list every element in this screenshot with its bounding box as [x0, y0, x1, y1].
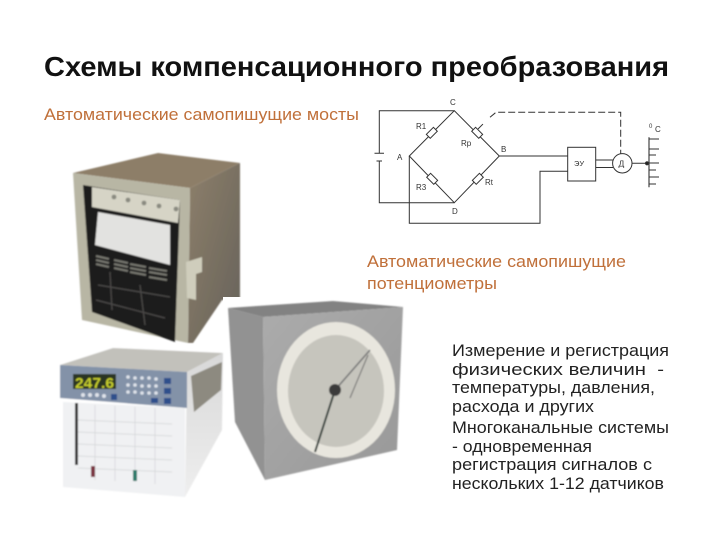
photo: digital recorder — [50, 344, 232, 505]
paragraph 2: - одновременная — [452, 437, 592, 456]
circuit labels: C — [450, 98, 456, 107]
paragraph 2: регистрация сигналов с — [452, 455, 653, 474]
scale plate — [92, 187, 180, 223]
resistor Rt — [472, 173, 483, 184]
backing — [50, 344, 232, 505]
front frame — [73, 173, 190, 343]
paragraph 1: физических величин - — [452, 360, 664, 379]
paragraph 2 — [452, 418, 669, 493]
heading: bridges: Автоматические самопишущие мосты — [44, 105, 359, 124]
chart grid — [78, 405, 172, 484]
resistor Rp — [472, 127, 483, 138]
scale marks — [112, 195, 178, 211]
circuit labels: Д — [618, 158, 624, 168]
circuit labels: 0 — [649, 124, 653, 130]
paper chart — [95, 212, 170, 265]
double link to motor — [596, 160, 649, 168]
white photo backing — [223, 297, 243, 315]
dashed feedback — [478, 112, 621, 155]
thin pen arm — [350, 355, 368, 398]
scale — [649, 137, 659, 187]
circuit labels: C — [655, 125, 661, 134]
resistor R1 — [426, 127, 437, 138]
top of case — [60, 348, 223, 372]
supply wires and battery — [374, 111, 454, 203]
chart left strip — [75, 403, 78, 465]
photo: circular recorder — [228, 301, 403, 480]
chart front — [63, 402, 185, 497]
needle hub — [329, 384, 341, 396]
side of case — [188, 163, 240, 343]
case front — [263, 307, 403, 480]
dial ring — [277, 322, 395, 458]
door latch — [186, 257, 202, 300]
heading: potentiometers: потенциометры — [367, 274, 497, 293]
circuit labels: ЭУ — [574, 159, 584, 168]
dark interior — [83, 185, 180, 342]
LED digits: 247.6 — [75, 375, 114, 392]
circuit labels — [397, 98, 661, 216]
paragraph 1: Измерение и регистрация — [452, 341, 669, 360]
heading: potentiometers — [367, 252, 626, 293]
side mechanics — [191, 362, 222, 412]
body text — [452, 341, 669, 493]
signal wires — [409, 156, 568, 223]
case top — [228, 301, 403, 317]
paragraph 1: расхода и других — [452, 397, 595, 416]
bridge arms — [409, 111, 499, 203]
LED display — [73, 374, 116, 389]
top of case — [73, 153, 240, 188]
paragraph 1: температуры, давления, — [452, 378, 655, 397]
circuit labels: R3 — [416, 183, 427, 192]
circuit diagram — [374, 111, 659, 223]
side of case — [185, 353, 223, 497]
circuit labels: Rt — [485, 178, 494, 187]
heading: potentiometers: Автоматические самопишущие — [367, 252, 626, 271]
title: Схемы компенсационного преобразования — [44, 51, 669, 82]
circuit labels: Rp — [461, 139, 472, 148]
circuit labels: A — [397, 153, 403, 162]
blue keys — [111, 378, 171, 404]
circuit labels: D — [452, 207, 458, 216]
control panel — [60, 365, 187, 408]
paragraph 2: Многоканальные системы — [452, 418, 669, 437]
buttons — [81, 375, 158, 398]
paragraph 2: нескольких 1-12 датчиков — [452, 474, 664, 493]
amplifier block — [568, 147, 596, 181]
resistor R3 — [427, 173, 438, 184]
photo: bridge recorder — [73, 153, 240, 343]
controls — [96, 256, 167, 280]
case side — [228, 308, 265, 480]
motor — [613, 154, 632, 173]
dial face — [288, 335, 384, 447]
circuit labels: B — [501, 145, 506, 154]
upper needle — [335, 350, 370, 390]
chart markers — [91, 466, 137, 481]
paragraph 1 — [452, 341, 669, 416]
scale pointer — [645, 162, 649, 165]
lower needle — [315, 390, 335, 452]
lower circuitry — [96, 272, 170, 325]
circuit labels: R1 — [416, 122, 427, 131]
